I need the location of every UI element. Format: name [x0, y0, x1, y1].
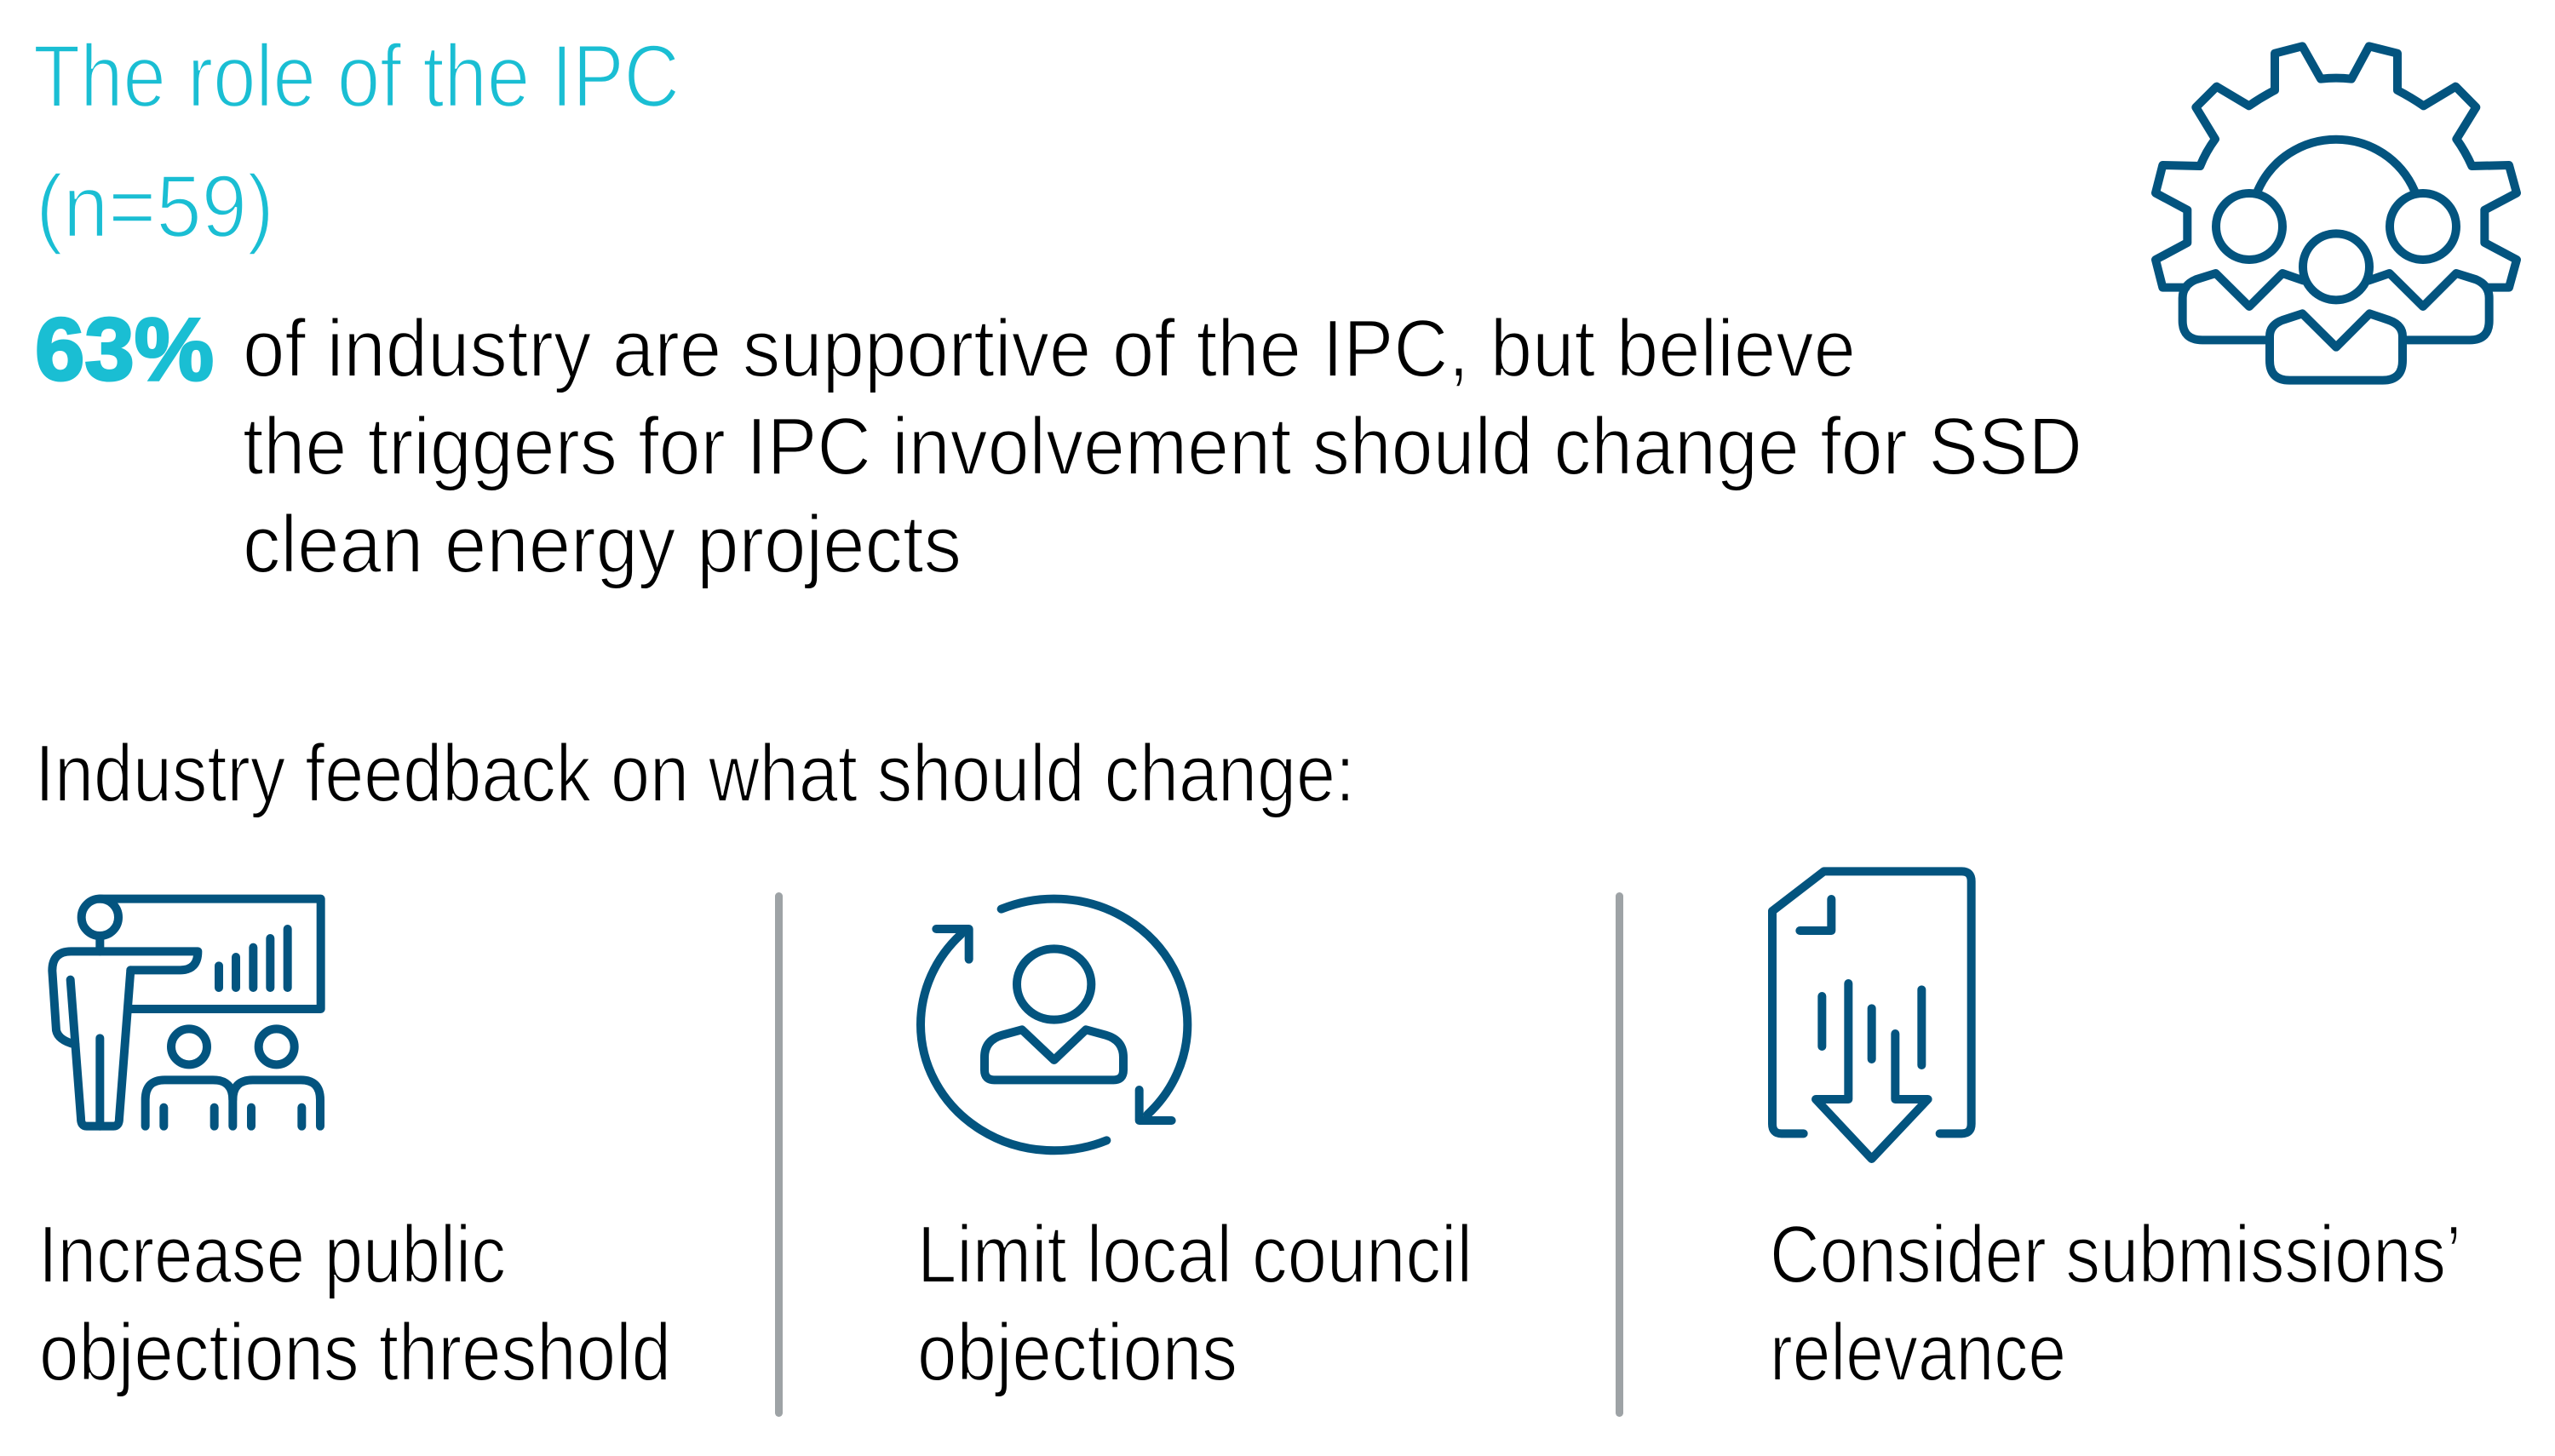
divider 1 [775, 892, 783, 1417]
title: (n=59) [36, 158, 274, 256]
stat value: 63% [35, 301, 214, 399]
label: limit local council objections: Limit local council [917, 1209, 1473, 1300]
icon: gear with people [2156, 46, 2517, 381]
stat description: the triggers for IPC involvement should change for SSD [243, 401, 2082, 492]
label: limit local council objections: objections [917, 1307, 1237, 1398]
label: increase public objections threshold [38, 1209, 671, 1398]
icon: document with down arrow [1772, 871, 1972, 1159]
label: increase public objections threshold: objections threshold [39, 1307, 671, 1398]
icon: person with cycle arrows [921, 899, 1187, 1150]
icon: presenter with audience [52, 899, 321, 1126]
stat: 63 percent supportive [35, 301, 2082, 590]
subheading: Industry feedback on what should change: [35, 728, 1355, 819]
label: limit local council objections [917, 1209, 1473, 1398]
label: increase public objections threshold: Increase public [38, 1209, 506, 1300]
label: consider submissions relevance [1770, 1209, 2461, 1398]
label: consider submissions relevance: relevance [1770, 1307, 2066, 1398]
title: The role of the IPC [33, 27, 680, 126]
title [33, 27, 680, 256]
divider 2 [1616, 892, 1623, 1417]
stat description: clean energy projects [243, 499, 962, 590]
stat description [243, 303, 2082, 590]
stat description: of industry are supportive of the IPC, but believe [243, 303, 1856, 394]
